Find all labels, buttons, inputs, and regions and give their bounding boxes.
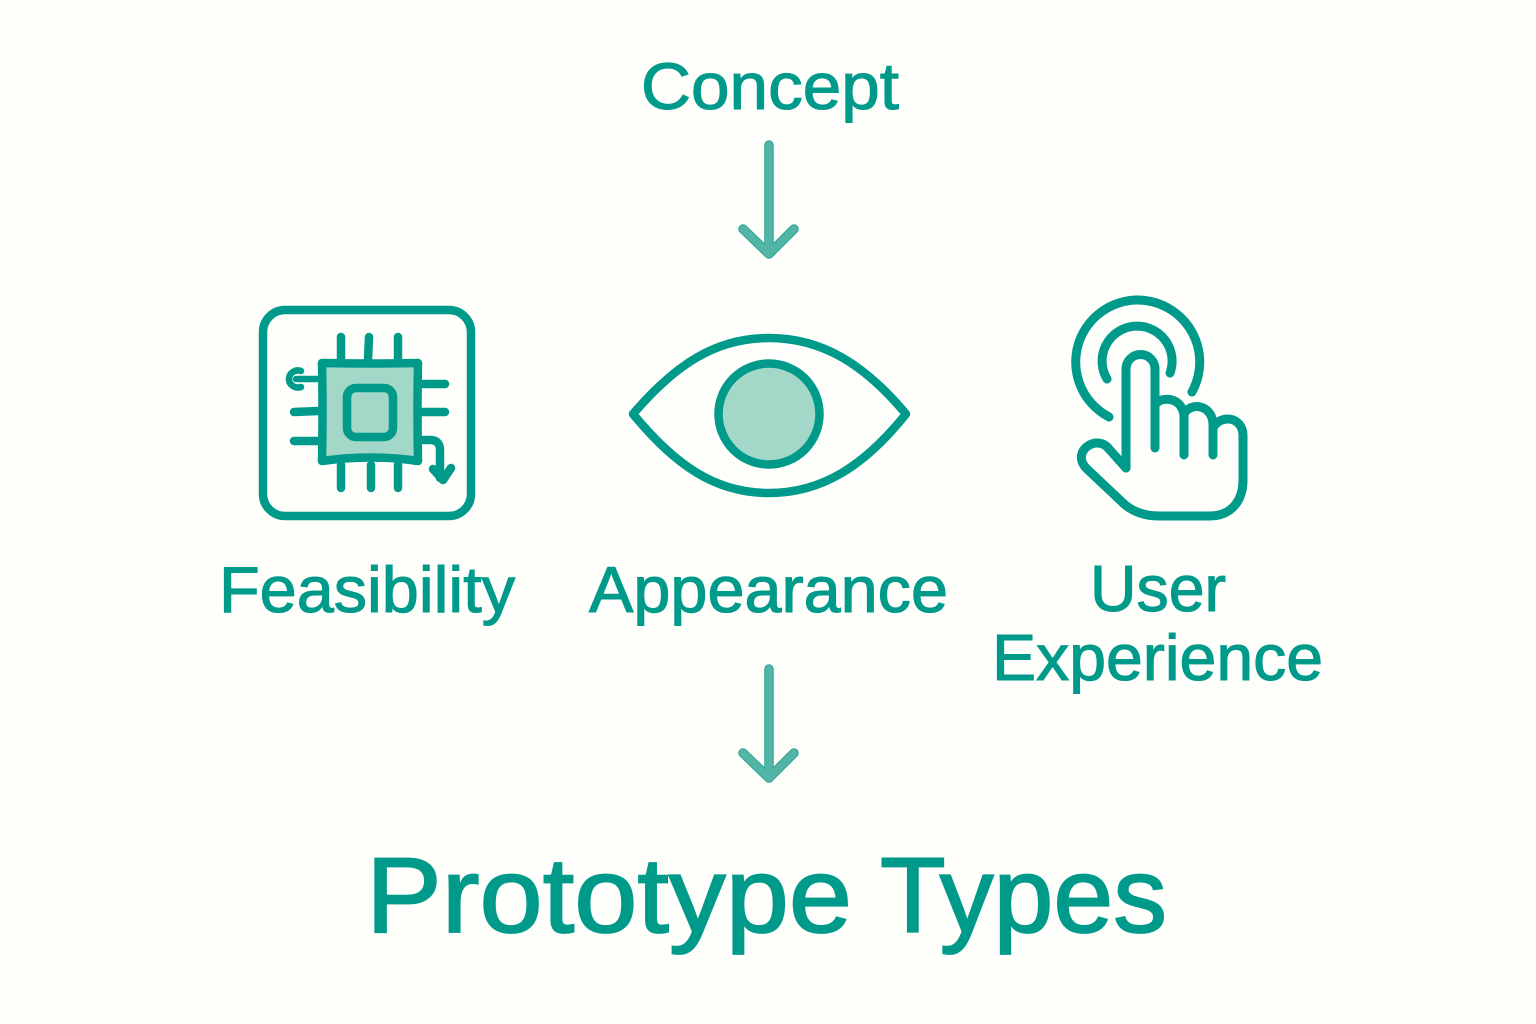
label: Appearance: Appearance [589, 553, 948, 626]
title: Prototype Types: Prototype [366, 835, 852, 955]
label: User Experience: Experience [992, 621, 1323, 694]
title: Prototype Types [366, 835, 1167, 955]
arrow: categories to prototype types [743, 669, 794, 778]
title: Prototype Types: Types [880, 835, 1167, 955]
label: Concept: Concept [641, 49, 899, 123]
arrow: concept to prototype categories [743, 145, 794, 254]
icon: microchip [263, 310, 471, 516]
label: User Experience: User [1090, 552, 1226, 625]
icon: eye [633, 338, 906, 493]
icon: touch hand [1076, 300, 1243, 516]
label: User Experience [992, 552, 1323, 694]
label: Feasibility: Feasibility [219, 553, 516, 626]
